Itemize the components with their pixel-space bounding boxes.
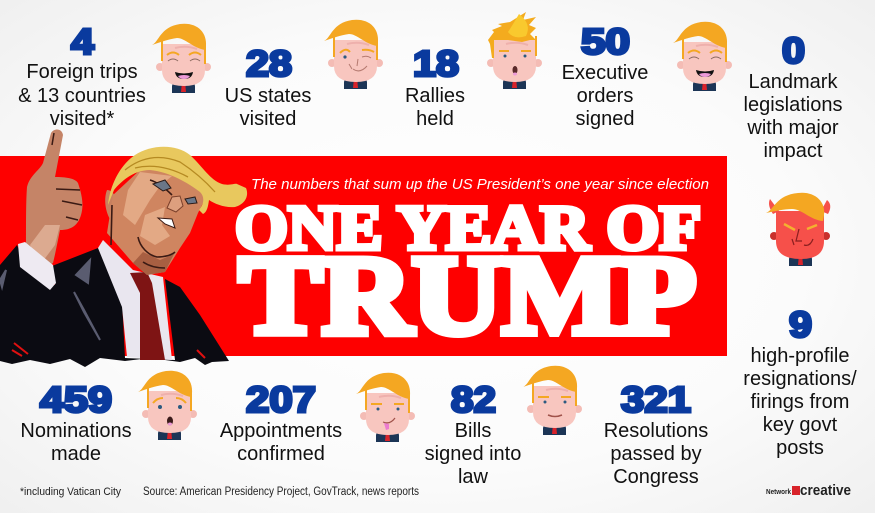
nose bbox=[167, 196, 183, 212]
number: 459 bbox=[40, 379, 112, 420]
label: Congress bbox=[613, 466, 699, 488]
suit bbox=[0, 245, 229, 367]
number: 207 bbox=[246, 379, 316, 420]
label: law bbox=[458, 466, 489, 488]
hand highlight bbox=[30, 225, 60, 265]
title line: trump: TRUMP bbox=[239, 234, 696, 358]
label: visited bbox=[240, 108, 296, 130]
label: visited* bbox=[50, 108, 114, 130]
label: Landmark bbox=[749, 71, 838, 93]
label: legislations bbox=[744, 94, 842, 116]
stat: foreign trips bbox=[18, 21, 146, 130]
logo word: network: Network bbox=[766, 487, 792, 496]
face highlights bbox=[123, 172, 172, 245]
label: signed into bbox=[425, 443, 521, 465]
label: with major bbox=[746, 117, 839, 139]
label: & 13 countries bbox=[18, 85, 146, 107]
label: Executive bbox=[562, 62, 648, 84]
logo word: creative: creative bbox=[800, 482, 851, 499]
label: signed bbox=[576, 108, 634, 130]
label: confirmed bbox=[237, 443, 325, 465]
facial lines bbox=[111, 180, 175, 268]
number: 50 bbox=[581, 21, 630, 62]
label: posts bbox=[776, 437, 824, 459]
label: orders bbox=[577, 85, 633, 107]
footnote: *including Vatican City bbox=[20, 486, 121, 498]
illustration: Trump thumbs up bbox=[0, 129, 247, 367]
stat: resignations bbox=[743, 304, 857, 459]
ear bbox=[105, 190, 118, 225]
label: firings from bbox=[751, 391, 849, 413]
stat: executive orders bbox=[562, 21, 648, 130]
title line: one year of: ONE YEAR OF bbox=[235, 193, 701, 263]
number: 28 bbox=[246, 43, 292, 84]
stat: resolutions bbox=[604, 379, 708, 488]
stat: appointments bbox=[220, 379, 342, 465]
main title bbox=[235, 193, 701, 358]
label: key govt bbox=[763, 414, 838, 436]
label: held bbox=[416, 108, 454, 130]
label: Nominations bbox=[20, 420, 132, 442]
head bbox=[107, 170, 207, 275]
label: passed by bbox=[610, 443, 702, 465]
stat: rallies bbox=[405, 43, 465, 130]
cuff bbox=[18, 242, 56, 290]
tie bbox=[130, 272, 165, 360]
icon: shocked face bbox=[138, 371, 197, 440]
label: Bills bbox=[455, 420, 491, 442]
number: 18 bbox=[413, 43, 459, 84]
label: impact bbox=[764, 140, 823, 162]
hair highlights bbox=[125, 158, 215, 192]
red accents bbox=[12, 343, 205, 358]
icon: laughing face 2 bbox=[673, 22, 732, 91]
stat: landmark legislations bbox=[744, 30, 842, 162]
number: 0 bbox=[782, 30, 805, 71]
red banner bbox=[0, 156, 727, 356]
label: Foreign trips bbox=[26, 61, 138, 83]
teeth bbox=[158, 218, 175, 228]
icon: laughing face 1 bbox=[152, 24, 211, 93]
hair bbox=[108, 147, 247, 214]
icon: neutral face bbox=[523, 366, 582, 435]
finger lines bbox=[52, 133, 82, 220]
number: 82 bbox=[451, 379, 496, 420]
icon: winking face bbox=[324, 20, 383, 89]
label: US states bbox=[225, 85, 311, 107]
icon: devil face bbox=[766, 193, 830, 266]
label: Appointments bbox=[220, 420, 342, 442]
icon: windswept hair face bbox=[487, 12, 542, 89]
label: Resolutions bbox=[604, 420, 708, 442]
shirt bbox=[98, 240, 172, 360]
label: high-profile bbox=[751, 345, 849, 367]
label: resignations/ bbox=[743, 368, 857, 390]
number: 321 bbox=[621, 379, 691, 420]
eyes bbox=[153, 180, 197, 204]
hand bbox=[26, 129, 82, 270]
icon: smirking face bbox=[356, 373, 415, 442]
face shadow bbox=[133, 252, 174, 275]
stat: US states bbox=[225, 43, 311, 130]
banner subtitle: The numbers that sum up the US President’s one year since election bbox=[251, 176, 709, 193]
logo badge bbox=[792, 486, 800, 495]
label: made bbox=[51, 443, 101, 465]
number: 9 bbox=[789, 304, 812, 345]
number: 4 bbox=[71, 21, 94, 62]
stat: bills bbox=[425, 379, 521, 488]
source line: Source: American Presidency Project, GovTrack, news reports bbox=[143, 486, 419, 498]
label: Rallies bbox=[405, 85, 465, 107]
suit highlights bbox=[0, 260, 100, 340]
stat: nominations bbox=[20, 379, 132, 465]
logo: Network18 creative bbox=[766, 482, 851, 499]
